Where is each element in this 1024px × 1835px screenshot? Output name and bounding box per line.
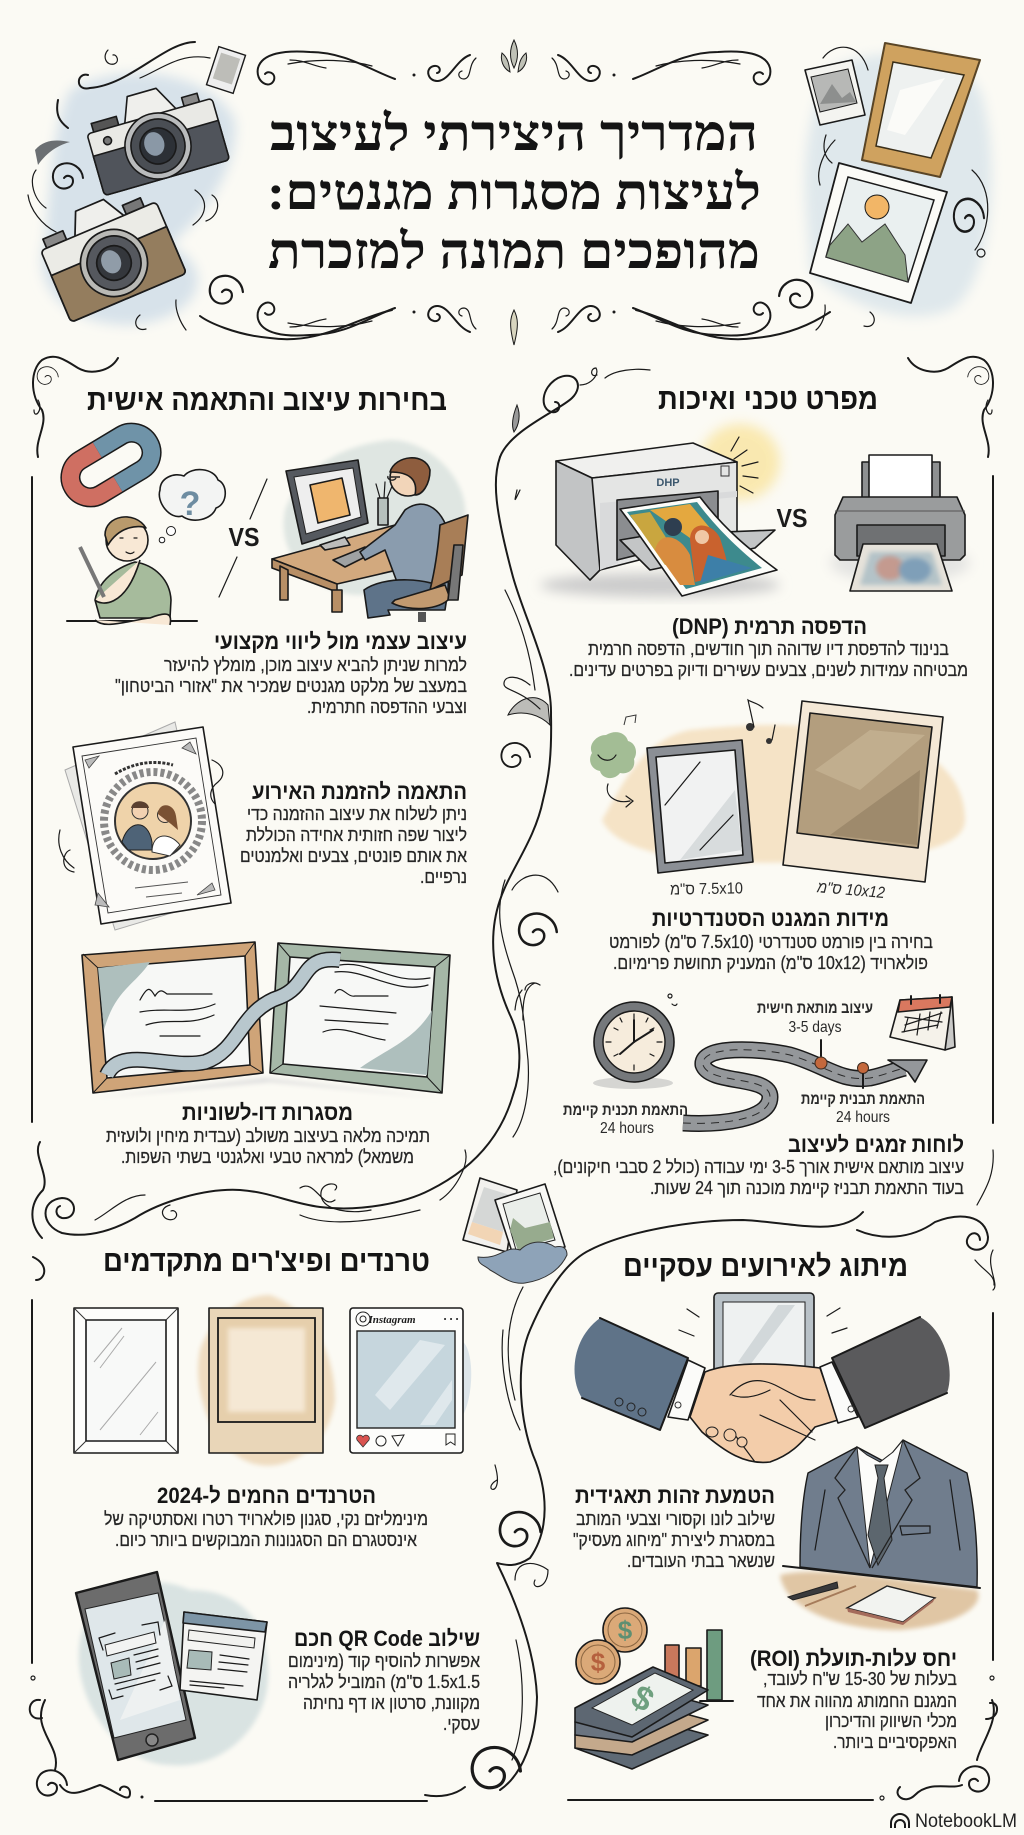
text: design timeline: לוחות זמגים לעיצוב [788, 1132, 964, 1157]
text: hot trends: מינימליזם נקי, סגנון פולארויד רטרו ואסתטיקה של [104, 1509, 428, 1529]
text: cost benefit: בעלות של 15-30 ש"ח לעובד, [763, 1669, 957, 1689]
vs label: VS [776, 503, 808, 533]
text: match event invitation [240, 779, 468, 887]
small framed photo [207, 47, 245, 93]
heading: טרנדים ופיצ'רים מתקדמים [103, 1245, 430, 1278]
text: QR code integration: אפשרות להוסיף קוד (מינימום [288, 1651, 481, 1671]
icon: bilingual frames [82, 942, 450, 1098]
text: hot trends [104, 1483, 428, 1550]
icon: retro polaroid frame [198, 1295, 335, 1466]
icon: clock [593, 994, 677, 1089]
icon: polaroids on a cloud [463, 1178, 567, 1283]
text: hot trends: הטרנדים החמים ל-2024 [157, 1483, 376, 1508]
icon: instagram style frame: Instagram [367, 1314, 416, 1326]
heading: בחירות עיצוב והתאמה אישית [87, 384, 447, 417]
text: corporate identity: במסגרת ליצירת "מיחוג מעסיק" [573, 1530, 775, 1550]
text: match event invitation: נרפיים. [420, 867, 467, 887]
icon: thermal DNP printer: DHP [656, 477, 680, 489]
bottom scrollwork [136, 276, 874, 345]
icon: magnet sizes [590, 700, 965, 882]
icon: wedding invitation [59, 722, 231, 930]
icon: gold frame [862, 43, 980, 177]
icon: handshake with frame [575, 1293, 950, 1462]
text: self design vs professional [115, 629, 467, 717]
title: המדריך היצירתי לעיצוב [270, 105, 758, 161]
icon: phone and browser with QR [76, 1572, 268, 1765]
text: standard sizes [609, 906, 933, 973]
timeline labels: עיצוב מותאת חישית [757, 1000, 873, 1017]
text: QR code integration [288, 1626, 481, 1734]
timeline labels: התאמת תכנית קיימת [563, 1102, 688, 1119]
text: design timeline: עיצוב מותאם אישית אורך 3-5 ימי עבודה (כולל 2 סבבי חיקונים), [553, 1157, 964, 1177]
heading: מפרט טכני ואיכות [658, 383, 878, 416]
text: bilingual frames [106, 1100, 430, 1167]
timeline labels: 3-5 days [788, 1019, 842, 1036]
text: standard sizes: פולארויד (10x12 ס"מ) המעניק תחושת פרימיום. [613, 953, 928, 973]
text: match event invitation: התאמה להזמנת האירוע [252, 779, 467, 804]
heading: מיתוג לאירועים עסקיים [623, 1250, 908, 1283]
text: standard sizes: בחירה בין פורמט סטנדרטי (7.5x10 ס"מ) לפורמט [609, 932, 933, 952]
timeline labels: 24 hours [836, 1109, 890, 1126]
timeline labels: 24 hours [600, 1120, 654, 1137]
vs divider: VS [228, 522, 260, 552]
left side swirls [28, 42, 218, 232]
icon: roadmap road with pins [683, 1040, 927, 1123]
text: corporate identity: שנשאר בבתי העובדים. [627, 1551, 775, 1571]
title [267, 105, 761, 279]
timeline labels: התאמת תבנית קיימת [801, 1091, 925, 1108]
text: thermal printing: מבטיחה עמידות לשנים, צבעים עשירים ודיוק בפרטים עדינים. [569, 660, 968, 680]
text: QR code integration: עסקי. [443, 1714, 480, 1734]
title: לעיצות מסגרות מגנטים: [267, 164, 761, 220]
text: self design vs professional: וצבעי ההדפסה חתרמית. [307, 697, 467, 717]
right side swirls [819, 47, 988, 257]
panel: branding for business events [573, 1250, 980, 1769]
icon: thermal DNP printer [540, 424, 780, 597]
text: corporate identity [573, 1483, 775, 1571]
text: cost benefit: יחס עלות-תועלת (ROI) [750, 1646, 957, 1671]
icon: inkjet printer [830, 455, 970, 591]
text: match event invitation: ליצור שפה חזותית אחידה הכוללת [246, 825, 467, 845]
icon: coins, bars and money stack: $ [618, 1615, 633, 1645]
icon: calendar [890, 995, 955, 1050]
text: design timeline: בעוד התאמת תבניז קיימת מוכנה תוך 24 שעות. [650, 1178, 964, 1198]
text: QR code integration: 1.5x1.5 ס"מ) המוביל לגלריה [288, 1672, 480, 1692]
text: cost benefit [750, 1646, 957, 1752]
text: self design vs professional: למרות שניתן להביא עיצוב מוכן, מומלץ להיעזר [164, 655, 467, 675]
text: corporate identity: הטמעת זהות תאגידית [575, 1483, 775, 1508]
text: thermal printing [569, 614, 968, 680]
text: standard sizes: מידות המגנט הסטנדרטיות [652, 906, 889, 931]
panel: design choices and personalization [59, 384, 468, 1167]
text: thermal printing: הדפסה תרמית (DNP) [672, 614, 867, 639]
icon: minimalist frame [74, 1308, 178, 1453]
text: match event invitation: ניתן לשלוח את עיצוב ההזמנה כדי [247, 804, 467, 824]
timeline labels [563, 1000, 925, 1137]
icon: grey polaroid [805, 60, 865, 125]
icon: thought bubble [159, 470, 225, 543]
icon: top camera [80, 74, 230, 196]
text: bilingual frames: תמיכה מלאה בעיצוב משולב (עבדית מיחין ולועזית [106, 1126, 430, 1146]
icon: horseshoe magnet [63, 425, 159, 505]
icon: person thinking with brush [67, 517, 197, 625]
text: QR code integration: מקוונת, סרטון או דף נחיתה [303, 1693, 480, 1713]
label: large size: 10x12 ס"מ [815, 879, 886, 902]
icon: coins, bars and money stack: $ [591, 1647, 606, 1677]
icon: bottom camera [32, 181, 186, 322]
text: self design vs professional: במעצב של מלקט מגנטים שמכיר את "אזורי הביטחון" [115, 676, 467, 696]
vs divider [219, 479, 267, 597]
icon: landscape photo [810, 163, 947, 303]
title: מהופכים תמונה למזכרת [268, 223, 760, 279]
text: cost benefit: האפקסיביים ביותר. [833, 1732, 957, 1752]
text: hot trends: אינסטגרם הם הסגנונות המבוקשים ביותר כיום. [115, 1530, 418, 1550]
text: QR code integration: שילוב QR Code חכם [294, 1626, 480, 1651]
text: corporate identity: שילוב לונו וקסורי וצבעי המותב [576, 1509, 775, 1529]
text: self design vs professional: עיצוב עצמי מול ליווי מקצועי [214, 629, 467, 654]
text: cost benefit: מכלי השיווק והדיכרון [825, 1711, 957, 1731]
text: cost benefit: המגנם החמותג מהווה את אחד [757, 1691, 957, 1711]
icon: coins, bars and money stack [575, 1608, 733, 1769]
header [28, 40, 992, 345]
header watercolor washes [42, 54, 992, 325]
panel frame and dividers [30, 357, 997, 1801]
panel: technical specification [540, 383, 970, 1198]
text: bilingual frames: משמאל) למראה טבעי ואלגנטי בשתי השפות. [121, 1147, 414, 1167]
icon: designer at desk [272, 440, 468, 622]
logo: NotebookLM: NotebookLM [915, 1811, 1017, 1832]
icon: coins, bars and money stack: $ [625, 1678, 660, 1720]
text: design timeline [553, 1132, 964, 1198]
icon: thought bubble: ? [180, 485, 200, 523]
label: small size: 7.5x10 ס"מ [670, 880, 743, 899]
icon: business suit with desk [780, 1440, 980, 1630]
text: thermal printing: בנינוד להדפסת דיו שדוהה תוך חודשים, הדפסה חרמית [588, 639, 949, 659]
icon: instagram style frame [350, 1308, 471, 1453]
text: bilingual frames: מסגרות דו-לשוניות [182, 1100, 353, 1125]
panel: trends and advanced features [74, 1245, 481, 1765]
text: match event invitation: את אותם פונטים, צבעים ואלמנטים [240, 846, 468, 866]
top scrollwork [258, 40, 770, 84]
